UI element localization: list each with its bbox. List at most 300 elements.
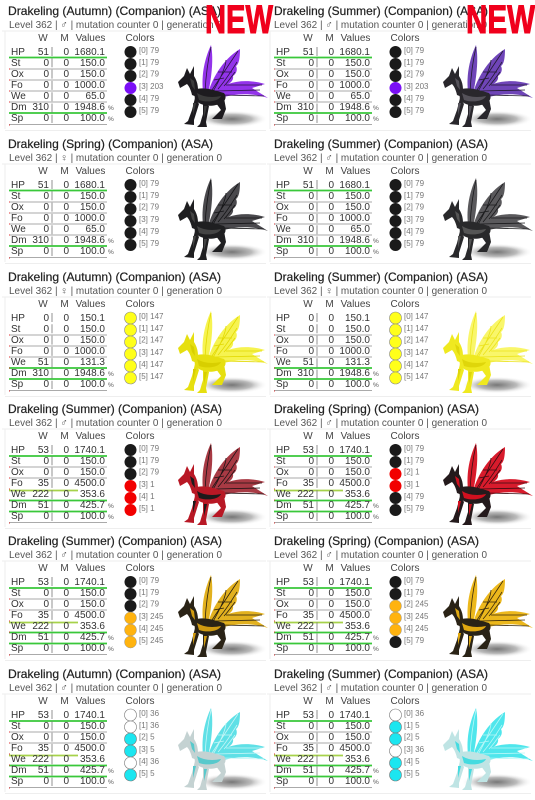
stats table: 0 [43, 91, 49, 102]
colour swatches [124, 299, 164, 384]
stats table: 0 [43, 58, 49, 69]
colour swatches: [1] 147 [139, 324, 164, 333]
stats table: 0 [43, 246, 49, 257]
subtitle: Level 362 | ♀ | mutation counter 0 | generation 0 [9, 152, 222, 164]
stats table: 0 [63, 599, 69, 610]
stats table: 100.0 [80, 113, 105, 124]
colour swatches: [1] 79 [139, 58, 160, 67]
stats table: 1740.1 [74, 710, 105, 721]
colour swatches: [0] 79 [139, 444, 160, 453]
stats table: Sp [276, 379, 289, 390]
colour swatches: [4] 79 [139, 94, 160, 103]
stats table: 1000.0 [74, 346, 105, 357]
stats table [274, 696, 379, 788]
stats table: 0 [63, 732, 69, 743]
colour swatches: [5] 245 [139, 636, 164, 645]
stats table: Sp [11, 776, 24, 787]
stats table: 150.0 [80, 588, 105, 599]
stats table: 0 [328, 467, 334, 478]
colour swatches [124, 166, 160, 251]
stats table: 0 [63, 313, 69, 324]
colour swatches: [4] 36 [139, 757, 160, 766]
stats table: 0 [328, 324, 334, 335]
stats table: 1000.0 [339, 346, 370, 357]
colour swatches: [5] 1 [139, 504, 155, 513]
stats table [9, 166, 114, 258]
stats table: 0 [63, 91, 69, 102]
colour swatches: [0] 79 [404, 576, 425, 585]
stats table: Sp [11, 643, 24, 654]
stats table: 0 [328, 224, 334, 235]
stats table: W [38, 299, 48, 310]
colour swatches [390, 299, 429, 384]
colour swatches: [4] 79 [139, 227, 160, 236]
stats table: 353.6 [345, 621, 370, 632]
stats table: 4500.0 [74, 743, 105, 754]
stats table: 0 [43, 202, 49, 213]
stats table: 65.0 [351, 224, 370, 235]
stats table: 0 [308, 324, 314, 335]
stats table: 150.0 [345, 732, 370, 743]
stats table: W [38, 33, 48, 44]
stats table: 222 [32, 754, 49, 765]
colour swatches: [0] 36 [139, 709, 160, 718]
colour swatches [124, 563, 164, 648]
stats table: 0 [63, 710, 69, 721]
panel: Summer purple [267, 4, 533, 130]
stats table: 131.3 [80, 357, 105, 368]
stats table: 0 [63, 180, 69, 191]
stats table: 0 [328, 610, 334, 621]
stats table: 1740.1 [339, 445, 370, 456]
stats table: 150.0 [80, 456, 105, 467]
stats table: M [60, 166, 69, 177]
stats table: 0 [328, 456, 334, 467]
stats table: 0 [63, 213, 69, 224]
stats table: 0 [63, 610, 69, 621]
stats table: 53 [38, 577, 49, 588]
stats table: St [11, 456, 21, 467]
stats table: 0 [328, 643, 334, 654]
stats table: M [325, 696, 334, 707]
colour swatches: Colors [126, 33, 154, 44]
stats table: 425.7 [80, 500, 105, 511]
stats table: 0 [308, 313, 314, 324]
colour swatches: [0] 147 [139, 312, 164, 321]
colour swatches: [2] 79 [139, 468, 160, 476]
stats table: 222 [32, 489, 49, 500]
stats table: % [373, 768, 379, 775]
colour swatches: [1] 79 [404, 58, 425, 67]
stats table: 1948.6 [339, 235, 370, 246]
colour swatches: [4] 245 [404, 624, 429, 633]
colour swatches: [5] 5 [404, 769, 420, 778]
stats table [9, 563, 114, 655]
panel: Spring black [2, 137, 268, 264]
dragon: purple Summer [443, 45, 533, 128]
stats table: Dm [276, 765, 292, 776]
stats table: M [60, 431, 69, 442]
stats table: 0 [63, 102, 69, 113]
stats table: 150.0 [80, 721, 105, 732]
stats table: 1948.6 [74, 235, 105, 246]
stats table: HP [11, 47, 25, 58]
stats table: 222 [297, 489, 314, 500]
stats table: 0 [63, 765, 69, 776]
colour swatches [124, 696, 160, 781]
stats table: 0 [63, 467, 69, 478]
stats table: 0 [328, 577, 334, 588]
colour swatches: Colors [126, 563, 154, 574]
stats table: 0 [63, 489, 69, 500]
stats table: 4500.0 [339, 743, 370, 754]
stats table: St [276, 58, 286, 69]
stats table: 0 [63, 202, 69, 213]
stats table: Dm [276, 500, 292, 511]
colour swatches: [0] 147 [404, 312, 429, 321]
colour swatches: [3] 147 [139, 348, 164, 357]
stats table: 53 [38, 710, 49, 721]
stats table: 35 [38, 610, 49, 621]
stats table: 425.7 [80, 632, 105, 643]
stats table: 1000.0 [74, 80, 105, 91]
stats table: St [11, 588, 21, 599]
subtitle: Level 362 | ♂ | mutation counter 0 | generation 0 [274, 417, 487, 429]
colour swatches: [5] 147 [139, 372, 164, 381]
dragon: black Summer [443, 178, 533, 260]
stats table: 0 [63, 235, 69, 246]
stats table: % [373, 779, 379, 786]
stats table: 0 [308, 379, 314, 390]
stats table: 0 [308, 91, 314, 102]
stats table: Sp [11, 113, 24, 124]
stats table: 100.0 [345, 776, 370, 787]
stats table: Sp [276, 511, 289, 522]
stats table: 150.0 [345, 588, 370, 599]
stats table: W [303, 33, 313, 44]
stats table: 51 [38, 765, 49, 776]
stats table: 35 [38, 478, 49, 489]
stats table: Values [341, 33, 370, 44]
stats table: We [276, 91, 291, 102]
stats table: 0 [43, 191, 49, 202]
subtitle: Level 362 | ♂ | mutation counter 0 | generation 0 [274, 19, 487, 31]
colour swatches: [2] 79 [139, 70, 160, 78]
stats table: 150.0 [80, 202, 105, 213]
colour swatches: [2] 79 [404, 202, 425, 212]
stats table: 51 [38, 47, 49, 58]
stats table: 0 [308, 643, 314, 654]
stats table: 0 [328, 776, 334, 787]
stats table: We [276, 621, 291, 632]
stats table: Ox [11, 335, 24, 346]
stats table: 0 [328, 191, 334, 202]
colour swatches: [1] 79 [139, 191, 160, 200]
colour swatches: [2] 79 [139, 202, 160, 212]
stats table: 0 [328, 710, 334, 721]
stats table: 51 [303, 765, 314, 776]
stats table: 0 [308, 335, 314, 346]
stats table: 310 [297, 235, 314, 246]
subtitle: Level 362 | ♀ | mutation counter 0 | generation 0 [9, 285, 222, 297]
stats table: 0 [328, 743, 334, 754]
stats table: St [276, 324, 286, 335]
stats table: 0 [43, 313, 49, 324]
stats table: 0 [308, 456, 314, 467]
stats table: 0 [63, 368, 69, 379]
title: Drakeling (Spring) (Companion) (ASA) [274, 402, 479, 416]
dragon: gold Spring [443, 575, 533, 658]
stats table: 0 [328, 213, 334, 224]
stats table: W [303, 696, 313, 707]
stats table: Sp [276, 113, 289, 124]
stats table: 35 [303, 743, 314, 754]
stats table: 0 [43, 588, 49, 599]
stats table: Dm [276, 632, 292, 643]
stats table: We [11, 357, 26, 368]
colour swatches: Colors [391, 431, 419, 442]
stats table: 0 [308, 202, 314, 213]
stats table: 0 [63, 511, 69, 522]
stats table: Dm [276, 368, 292, 379]
stats table: 0 [43, 721, 49, 732]
stats table: St [276, 456, 286, 467]
colour swatches: [4] 79 [404, 227, 425, 236]
colour swatches [124, 431, 160, 516]
stats table: HP [276, 710, 290, 721]
title: Drakeling (Autumn) (Companion) (ASA) [8, 667, 221, 681]
colour swatches: [3] 36 [404, 745, 425, 754]
stats table: Ox [276, 335, 289, 346]
stats table: 150.0 [80, 58, 105, 69]
stats table: Sp [276, 643, 289, 654]
stats table: HP [276, 445, 290, 456]
stats table: 0 [308, 80, 314, 91]
stats table: 0 [43, 335, 49, 346]
colour swatches: [4] 245 [139, 624, 164, 633]
subtitle: Level 362 | ♂ | mutation counter 0 | generation 0 [9, 682, 222, 694]
stats table: 0 [43, 324, 49, 335]
stats table: 0 [328, 80, 334, 91]
stats table: 51 [303, 357, 314, 368]
stats table: 0 [63, 588, 69, 599]
stats table: % [373, 238, 379, 245]
stats table: 0 [43, 213, 49, 224]
stats table: 0 [328, 765, 334, 776]
stats table: 4500.0 [339, 478, 370, 489]
stats table: % [108, 779, 114, 786]
dragon: cyan Autumn [178, 708, 268, 790]
stats table: M [325, 166, 334, 177]
colour swatches: [4] 147 [404, 360, 429, 369]
stats table: 310 [297, 102, 314, 113]
stats table: 0 [328, 346, 334, 357]
stats table: 1000.0 [339, 80, 370, 91]
stats table: M [60, 33, 69, 44]
stats table: St [11, 721, 21, 732]
colour swatches: [5] 79 [404, 504, 425, 513]
stats table: Fo [11, 80, 23, 91]
colour swatches [124, 33, 164, 118]
stats table: 0 [43, 224, 49, 235]
colour swatches: [4] 147 [139, 360, 164, 369]
stats table: 100.0 [80, 643, 105, 654]
stats table: 65.0 [86, 224, 105, 235]
stats table: W [38, 431, 48, 442]
stats table: 0 [308, 113, 314, 124]
stats table: 0 [328, 754, 334, 765]
colour swatches: [5] 79 [139, 239, 160, 248]
colour swatches: [3] 5 [139, 745, 155, 754]
stats table: 425.7 [345, 765, 370, 776]
stats table: 0 [63, 357, 69, 368]
stats table: 0 [63, 80, 69, 91]
stats table: Ox [276, 732, 289, 743]
stats table: 4500.0 [74, 610, 105, 621]
stats table: Ox [276, 467, 289, 478]
stats table: 150.0 [345, 324, 370, 335]
subtitle: Level 362 | ♂ | mutation counter 0 | generation 0 [274, 549, 487, 561]
stats table: M [60, 299, 69, 310]
stats table: 0 [308, 776, 314, 787]
title: Drakeling (Summer) (Companion) (ASA) [274, 137, 488, 151]
colour swatches: [5] 79 [404, 106, 425, 115]
dragon: cyan Summer [443, 708, 533, 790]
stats table: 100.0 [80, 246, 105, 257]
stats table: 65.0 [86, 91, 105, 102]
stats table: 0 [328, 357, 334, 368]
stats table: 222 [32, 621, 49, 632]
colour swatches: [4] 79 [404, 492, 425, 501]
stats table: 0 [43, 599, 49, 610]
stats table: 0 [63, 500, 69, 511]
colour swatches: Colors [391, 166, 419, 177]
stats table: Sp [11, 511, 24, 522]
stats table: Values [76, 299, 105, 310]
stats table: 353.6 [345, 489, 370, 500]
stats table: 0 [328, 379, 334, 390]
panel: Summer yellow [267, 270, 533, 396]
colour swatches: [1] 5 [404, 721, 420, 730]
stats table: 150.0 [345, 335, 370, 346]
stats table: % [108, 116, 114, 123]
stats table: 353.6 [80, 489, 105, 500]
stats table: 0 [328, 721, 334, 732]
stats table: Ox [11, 69, 24, 80]
stats table: 0 [63, 246, 69, 257]
stats table: 0 [43, 456, 49, 467]
stats table: 0 [63, 346, 69, 357]
stats table: 0 [328, 246, 334, 257]
stats table: 0 [328, 113, 334, 124]
stats table: 0 [63, 621, 69, 632]
stats table: 53 [38, 445, 49, 456]
stats table: Dm [11, 368, 27, 379]
subtitle: Level 362 | ♂ | mutation counter 0 | generation 0 [9, 549, 222, 561]
stats table: HP [276, 47, 290, 58]
colour swatches: Colors [391, 563, 419, 574]
stats table: 51 [38, 632, 49, 643]
stats table: 4500.0 [339, 610, 370, 621]
stats table: 100.0 [345, 643, 370, 654]
colour swatches: Colors [126, 299, 154, 310]
colour swatches: [4] 5 [404, 757, 420, 766]
stats table: 0 [63, 445, 69, 456]
stats table: % [108, 105, 114, 112]
colour swatches: [3] 147 [404, 348, 429, 357]
stats table: We [11, 621, 26, 632]
stats table: Fo [276, 478, 288, 489]
stats table: 0 [63, 113, 69, 124]
stats table: Fo [276, 80, 288, 91]
stats table: 310 [32, 368, 49, 379]
stats table: Ox [11, 202, 24, 213]
stats table: 0 [63, 224, 69, 235]
stats table: Dm [11, 500, 27, 511]
stats table: W [303, 166, 313, 177]
stats table: 222 [297, 754, 314, 765]
stats table: 1948.6 [74, 102, 105, 113]
stats table: 0 [63, 743, 69, 754]
stats table: 1740.1 [74, 445, 105, 456]
stats table: 0 [328, 180, 334, 191]
stats table: 1740.1 [74, 577, 105, 588]
stats table: 0 [63, 643, 69, 654]
stats table: 0 [328, 732, 334, 743]
colour swatches: [2] 147 [139, 336, 164, 344]
colour swatches: [1] 36 [139, 721, 160, 730]
stats table: 150.0 [345, 58, 370, 69]
colour swatches: Colors [126, 166, 154, 177]
stats table: 0 [43, 643, 49, 654]
colour swatches: [3] 79 [139, 215, 160, 224]
stats table: 0 [63, 69, 69, 80]
stats table: % [373, 382, 379, 389]
colour swatches: [5] 5 [139, 769, 155, 778]
stats table: 0 [63, 379, 69, 390]
stats table: 53 [303, 577, 314, 588]
stats table: % [108, 635, 114, 642]
stats table: Values [76, 431, 105, 442]
stats table: 150.0 [345, 467, 370, 478]
stats table: 100.0 [80, 511, 105, 522]
subtitle: Level 362 | ♂ | mutation counter 0 | generation 0 [274, 152, 487, 164]
stats table: 0 [308, 58, 314, 69]
stats table: 0 [63, 456, 69, 467]
stats table: 0 [63, 721, 69, 732]
stats table: 425.7 [345, 632, 370, 643]
stats table: We [276, 224, 291, 235]
stats table: St [11, 58, 21, 69]
stats table: 150.1 [345, 313, 370, 324]
stats table: 0 [328, 445, 334, 456]
stats table: % [108, 768, 114, 775]
stats table [9, 33, 114, 125]
stats table: 0 [308, 732, 314, 743]
stats table: Fo [11, 743, 23, 754]
stats table: W [303, 431, 313, 442]
stats table: 1948.6 [339, 102, 370, 113]
stats table: 0 [43, 467, 49, 478]
title: Drakeling (Spring) (Companion) (ASA) [274, 534, 479, 548]
stats table: 425.7 [80, 765, 105, 776]
stats table: 150.0 [80, 599, 105, 610]
title: Drakeling (Spring) (Companion) (ASA) [8, 137, 213, 151]
stats table: 51 [303, 632, 314, 643]
stats table: 0 [63, 324, 69, 335]
stats table: 0 [43, 80, 49, 91]
stats table: Ox [276, 202, 289, 213]
